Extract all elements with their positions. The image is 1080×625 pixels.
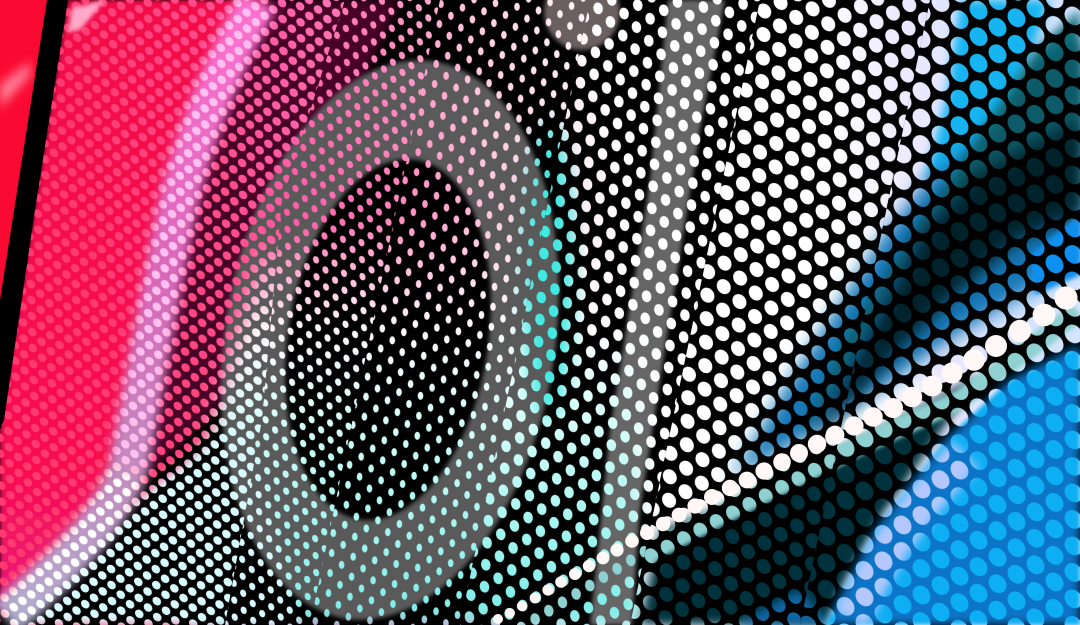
light arc band and diagonal white band at lower left xyxy=(6,0,258,618)
white to cyan wash over ring and lower centre xyxy=(190,170,640,625)
bright arc dots xyxy=(128,0,258,470)
solid blue field at lower right xyxy=(825,345,1080,625)
cyan wash on ring right edge xyxy=(522,120,574,420)
pale streak on red panel xyxy=(0,62,30,108)
mid blue fringe xyxy=(730,60,1080,480)
pale line under the white diagonal xyxy=(520,312,1078,620)
gray ring around the dark ellipse xyxy=(218,58,562,622)
white-cyan wash lower left xyxy=(0,415,300,625)
gray vertical stripe xyxy=(590,0,725,625)
teal zone xyxy=(800,10,1080,440)
red panel edge at left xyxy=(0,0,50,320)
gray top ellipse xyxy=(544,0,620,50)
near black zone xyxy=(810,120,1080,445)
pale pink patch at top of pink field xyxy=(68,0,105,32)
diagonal white LED line xyxy=(493,286,1078,624)
periwinkle dots edge of blue field xyxy=(850,455,965,620)
white diagonal band dots xyxy=(6,470,128,618)
blue field lower right xyxy=(825,345,1080,625)
pink field xyxy=(0,0,270,612)
blue streak at far right xyxy=(1030,215,1080,295)
black bezel stripe xyxy=(0,0,68,430)
magenta shadow zone xyxy=(145,0,400,480)
dim teal zone lower middle xyxy=(640,375,980,625)
dim blue dots above bottom edge xyxy=(735,590,830,625)
bright cyan band at top right xyxy=(925,0,1050,180)
